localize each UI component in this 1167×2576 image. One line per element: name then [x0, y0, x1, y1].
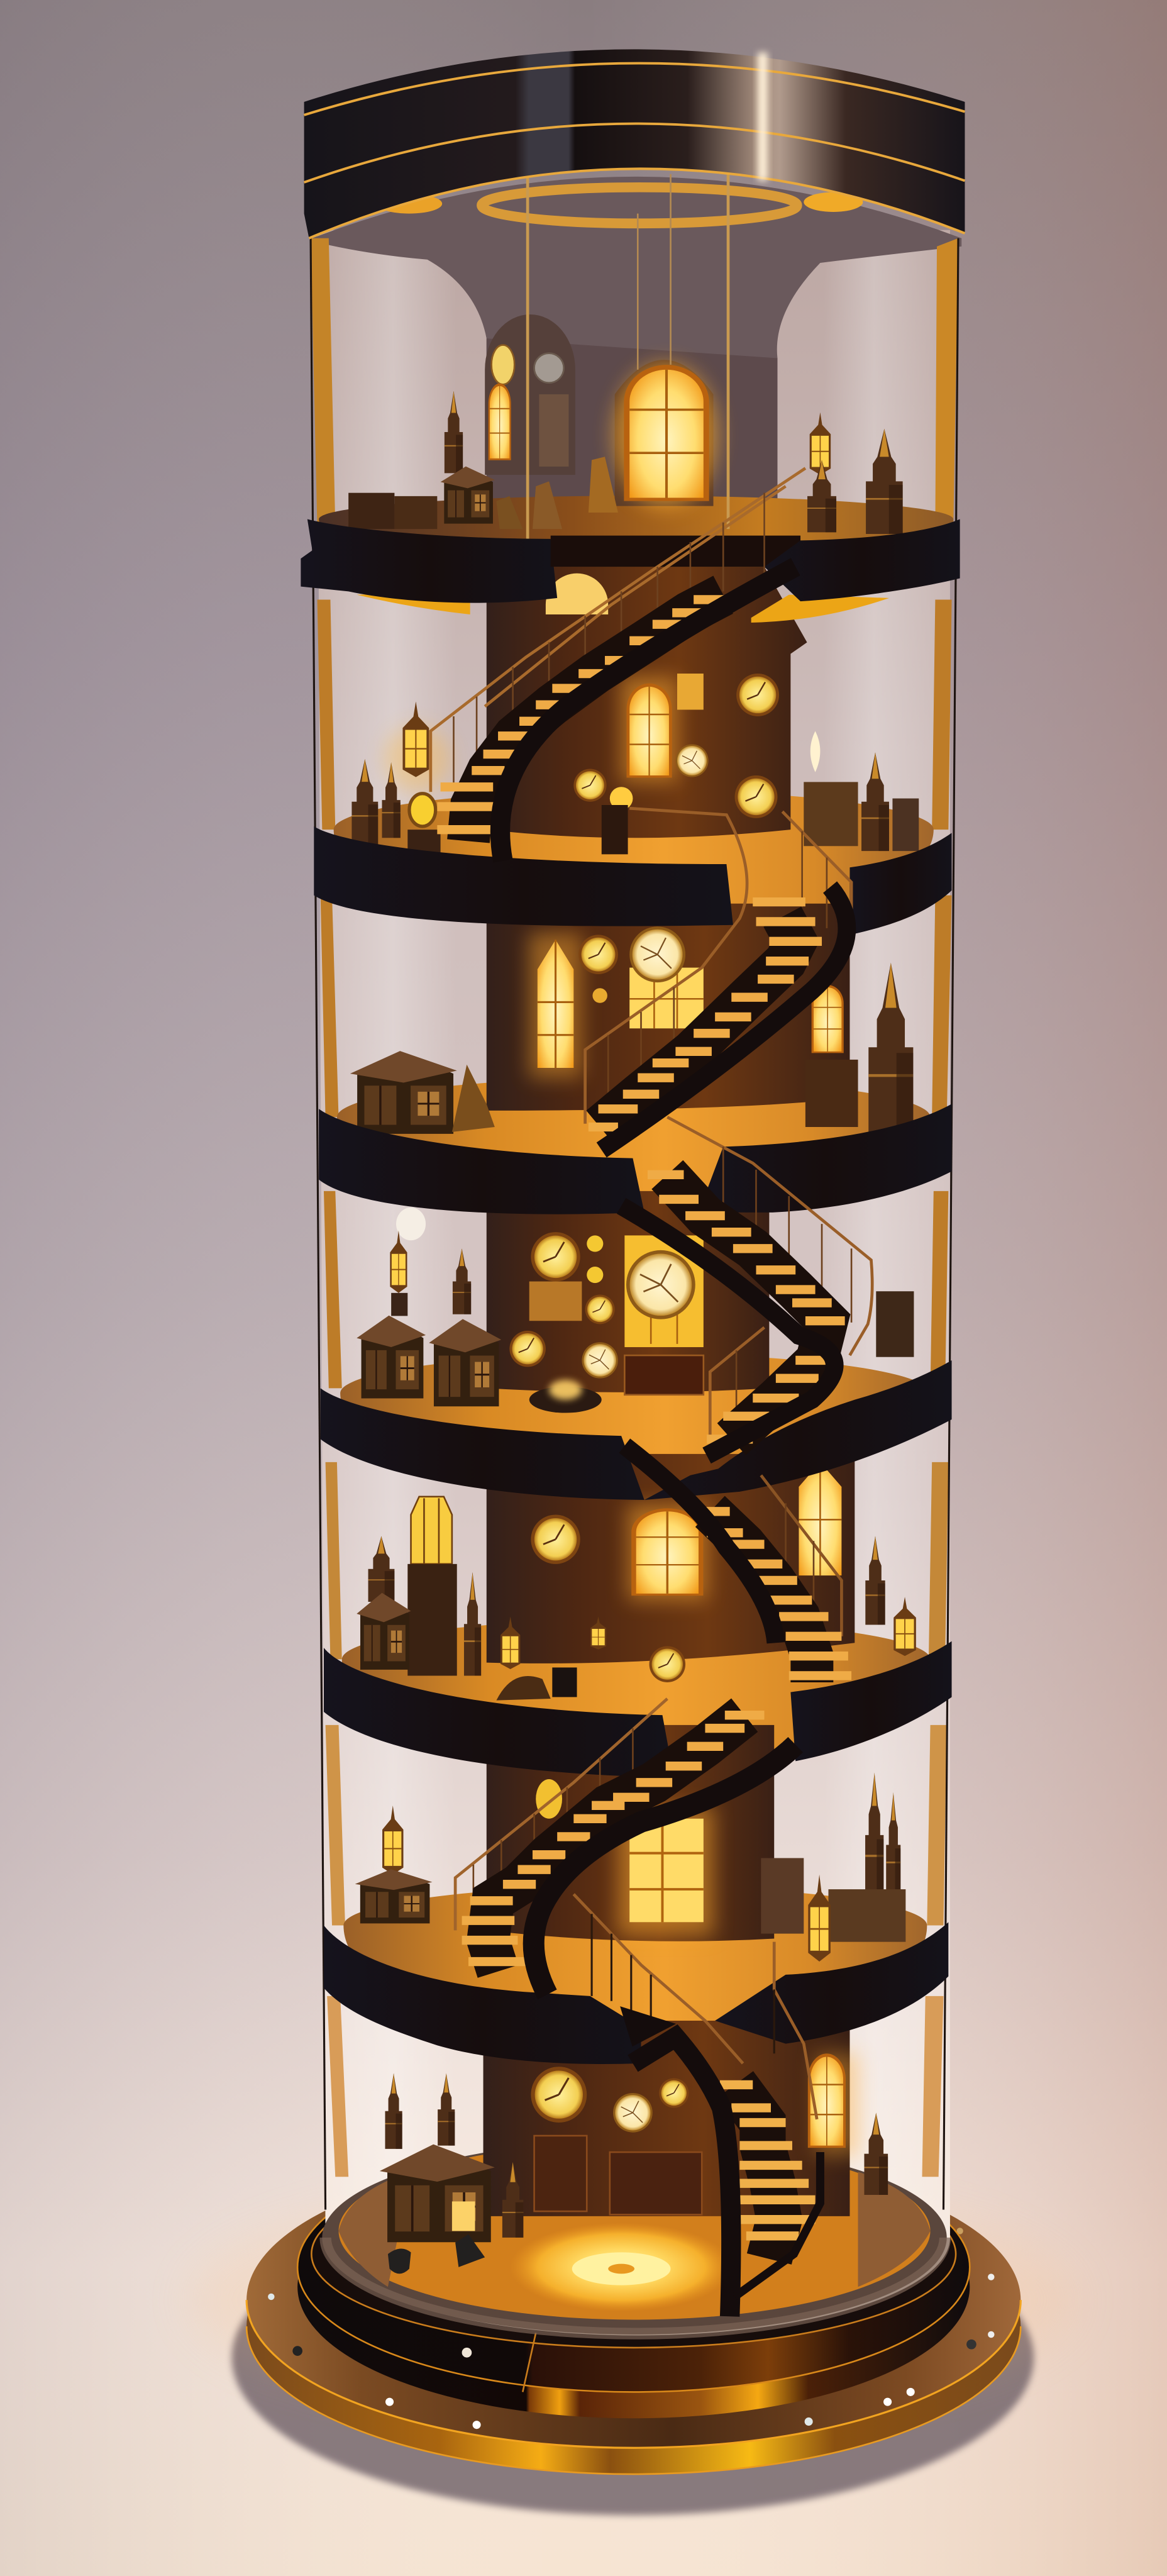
glass rim at base — [326, 2238, 945, 2334]
floor band 4 — [321, 1360, 952, 1500]
underglow level 1 — [357, 591, 889, 623]
central tower: level 5 — [487, 1454, 855, 1663]
base shadow — [232, 2200, 1034, 2515]
staircase 2 — [585, 808, 851, 1150]
floor plate level 5 — [342, 1619, 931, 1762]
level 5 contents — [357, 1462, 916, 1701]
window tower — [485, 314, 575, 475]
floor band 1 — [301, 519, 960, 603]
ceiling of top chamber — [312, 177, 961, 513]
copper base disc — [246, 2152, 1020, 2474]
floor band 3 — [319, 1104, 952, 1214]
central tower: level 2 — [487, 567, 807, 838]
top band — [304, 49, 965, 238]
glass outer edges — [311, 238, 958, 2209]
staircase 6 — [573, 1894, 820, 2316]
miniatures right — [807, 413, 903, 534]
level 4 contents — [357, 1208, 914, 1413]
floor plate level 1 — [319, 496, 953, 572]
glass amber edge strips — [311, 238, 958, 2177]
central tower: level 6 — [487, 1725, 774, 1941]
staircase 5 — [455, 1699, 795, 1994]
floor band 2 — [314, 826, 952, 935]
staircase 3 — [621, 1117, 872, 1455]
level 6 contents — [355, 1773, 905, 1962]
central tower: level 4 — [487, 1191, 769, 1392]
bottom floor — [322, 2141, 947, 2334]
floor plate level 3 — [337, 1077, 931, 1219]
top chamber contents — [348, 314, 903, 534]
staircase 1 — [431, 468, 805, 861]
arched main window — [613, 360, 718, 508]
base glow — [189, 2185, 1076, 2415]
ceiling lamps and ring — [377, 174, 863, 539]
floor plate level 4 — [340, 1353, 931, 1496]
staircase 4 — [624, 1446, 851, 1682]
central tower: level 3 — [487, 904, 849, 1111]
floor band 6 — [324, 1922, 948, 2064]
level 7 contents — [380, 2053, 888, 2273]
central tower: level 7 — [484, 2021, 849, 2216]
level 2 contents — [351, 574, 919, 856]
black stepped plinth — [297, 2142, 970, 2418]
floor plate level 6 — [343, 1886, 927, 2044]
miniatures left — [348, 391, 618, 529]
floor plate level 2 — [334, 790, 934, 932]
level 3 contents — [350, 926, 913, 1134]
glass cylinder back — [318, 230, 950, 2335]
floor band 5 — [324, 1641, 952, 1777]
top arched window — [546, 574, 608, 614]
top chamber tower fill — [487, 338, 777, 513]
